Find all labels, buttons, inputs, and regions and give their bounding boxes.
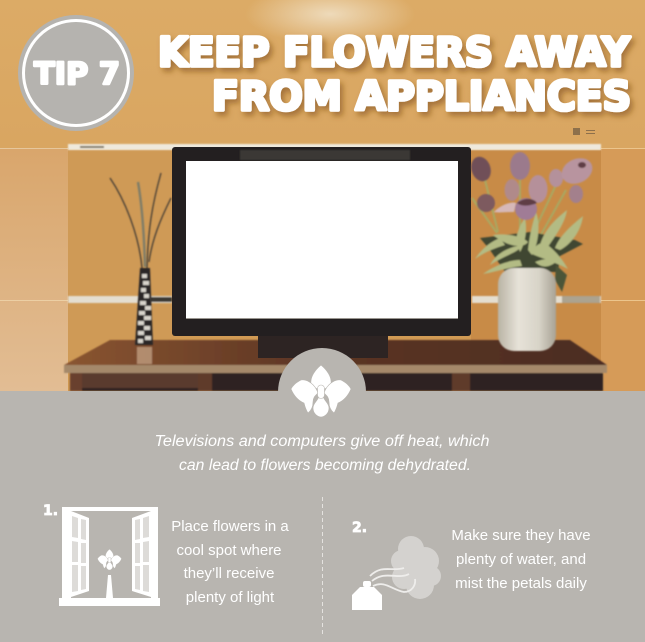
television xyxy=(172,147,471,358)
icon: mist spray can xyxy=(352,536,441,610)
photo: living room with television and flowers xyxy=(0,0,645,391)
step 1 text: plenty of light xyxy=(186,589,275,606)
dome with orchid icon xyxy=(278,348,366,417)
step 1 number: 1. xyxy=(43,503,58,519)
title xyxy=(158,30,631,120)
dark foliage xyxy=(480,232,583,272)
small wall label icon xyxy=(573,128,595,135)
step 2 text xyxy=(451,527,591,592)
tip 7 badge xyxy=(18,15,134,131)
left vase with twigs xyxy=(110,173,171,345)
step 2 number: 2. xyxy=(352,520,367,536)
flower vase with tulips xyxy=(468,152,597,351)
icon: open window with flower xyxy=(59,507,160,606)
panel: advice xyxy=(0,348,645,642)
step 2 text: plenty of water, and xyxy=(456,551,586,568)
step 1 text: cool spot where xyxy=(176,542,282,559)
title: FROM APPLIANCES xyxy=(212,74,631,120)
cabinet xyxy=(64,340,607,391)
intro text: Televisions and computers give off heat, which xyxy=(154,433,490,450)
step 1 text: Place flowers in a xyxy=(171,518,289,535)
tip label: TIP 7 xyxy=(34,57,120,92)
intro text xyxy=(154,433,490,474)
step 1 text: they’ll receive xyxy=(184,565,274,582)
intro text: can lead to flowers becoming dehydrated. xyxy=(179,457,471,474)
title: KEEP FLOWERS AWAY xyxy=(158,30,631,76)
step 2 text: mist the petals daily xyxy=(455,575,587,592)
step 1 text xyxy=(171,518,289,606)
shelf strips xyxy=(68,144,601,303)
step 2 text: Make sure they have xyxy=(451,527,591,544)
